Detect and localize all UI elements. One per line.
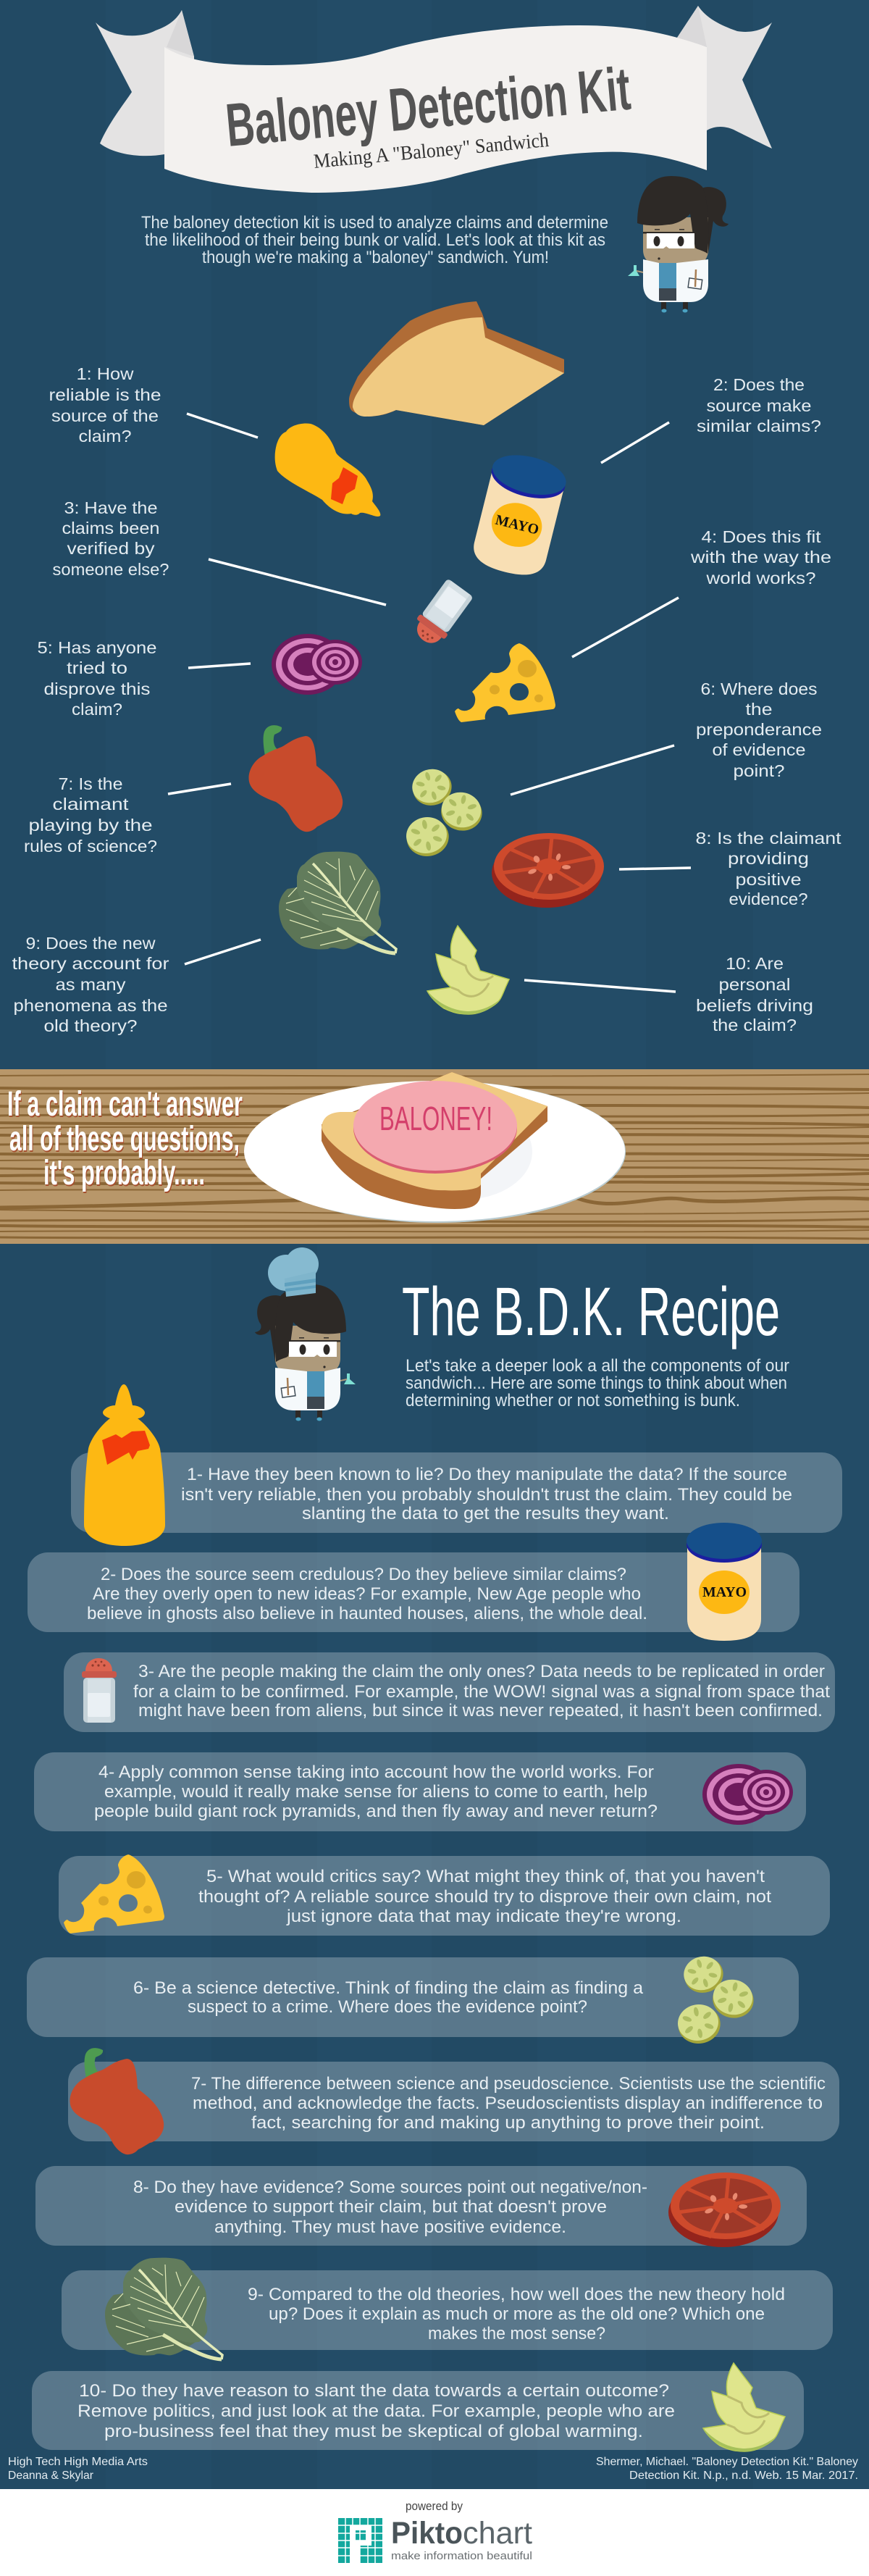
step 9 text: up? Does it explain as much or more as the old one? Which one xyxy=(269,2304,765,2324)
question 7: 7: Is the xyxy=(58,774,123,793)
question 1: 1: How xyxy=(77,364,134,383)
wood table band xyxy=(0,1069,869,1244)
callout: if a claim can't answer: it's probably..... xyxy=(43,1154,205,1192)
icon: avocado xyxy=(703,2363,785,2451)
icon: mustard bottle xyxy=(84,1384,165,1546)
icon: salt shaker xyxy=(82,1658,117,1723)
question 1: reliable is the xyxy=(49,385,161,404)
question 8: 8: Is the claimant xyxy=(695,829,841,848)
question 9: theory account for xyxy=(12,954,169,973)
step 8 text: anything. They must have positive evidence. xyxy=(214,2217,566,2237)
question 8: evidence? xyxy=(729,890,808,908)
question 5: tried to xyxy=(67,658,127,677)
callout: if a claim can't answer: all of these questions, xyxy=(9,1120,240,1158)
icon: lettuce xyxy=(105,2258,222,2359)
question 10 xyxy=(696,954,813,1034)
footer credits: High Tech High Media Arts xyxy=(8,2456,148,2468)
step 2 text: Are they overly open to new ideas? For example, New Age people who xyxy=(93,1584,641,1604)
question 9: old theory? xyxy=(43,1016,138,1035)
question 7: claimant xyxy=(52,795,129,814)
question 8: providing xyxy=(728,849,809,868)
step 3 text: 3- Are the people making the claim the only ones? Data needs to be replicated in order xyxy=(138,1662,825,1681)
step 10 text: 10- Do they have reason to slant the data towards a certain outcome? xyxy=(79,2381,669,2401)
step 5 text: just ignore data that may indicate they're wrong. xyxy=(286,1907,681,1926)
icon: cucumber slices xyxy=(403,764,486,860)
question 3: claims been xyxy=(62,519,159,538)
question 10: the claim? xyxy=(713,1016,797,1034)
icon: beet xyxy=(702,1764,793,1825)
question 3: someone else? xyxy=(52,560,169,579)
step 1 text xyxy=(181,1465,792,1523)
powered by label: powered by xyxy=(406,2499,463,2513)
connector 10 xyxy=(524,980,676,992)
step 7 text: 7- The difference between science and pseudoscience. Scientists use the scientific xyxy=(191,2074,826,2094)
step 5 text: 5- What would critics say? What might they think of, that you haven't xyxy=(206,1867,765,1886)
step 7 text: method, and acknowledge the facts. Pseudoscientists display an indifference to xyxy=(193,2094,823,2113)
icon: salt shaker xyxy=(408,577,474,650)
question 1: source of the xyxy=(51,406,159,425)
intro text: The baloney detection kit is used to analyze claims and determine xyxy=(141,213,608,233)
question 3 xyxy=(52,498,169,579)
question 9: 9: Does the new xyxy=(26,934,156,953)
panel: step 10 xyxy=(32,2363,804,2451)
callout: if a claim can't answer xyxy=(7,1085,243,1192)
question 2: similar claims? xyxy=(697,417,821,435)
panel: step 4 xyxy=(34,1752,806,1831)
recipe intro: determining whether or not something is bunk. xyxy=(406,1391,740,1410)
recipe intro: sandwich... Here are some things to think about when xyxy=(406,1373,787,1393)
question 4: with the way the xyxy=(690,548,831,566)
icon: mayo jar xyxy=(687,1523,762,1641)
question 9 xyxy=(12,934,169,1035)
question 6: the xyxy=(746,700,772,719)
question 2 xyxy=(697,375,821,435)
footer citation: Detection Kit. N.p., n.d. Web. 15 Mar. 2017. xyxy=(629,2470,858,2482)
step 3 text: might have been from aliens, but since it was never repeated, it hasn't been confirmed. xyxy=(138,1701,823,1720)
icon: tomato xyxy=(668,2173,781,2247)
step 7 text: fact, searching for and making up anything to prove their point. xyxy=(251,2113,765,2133)
icon: beet xyxy=(272,634,362,695)
step 9 text xyxy=(248,2285,785,2343)
icon: cheese xyxy=(64,1854,164,1933)
step 3 text xyxy=(133,1662,830,1720)
icon: red pepper xyxy=(70,2048,164,2154)
connector 3 xyxy=(209,559,386,605)
icon: red pepper xyxy=(248,725,343,832)
question 10: 10: Are xyxy=(726,954,784,973)
step 9 text: makes the most sense? xyxy=(428,2324,605,2343)
panel: step 3 xyxy=(64,1652,835,1732)
question 8: positive xyxy=(736,870,801,889)
plate xyxy=(244,1081,626,1223)
step 7 text xyxy=(191,2074,826,2133)
question 1: claim? xyxy=(78,427,132,446)
question 4 xyxy=(690,527,831,587)
connector 8 xyxy=(619,868,691,869)
question 5: disprove this xyxy=(43,679,151,698)
step 5 text xyxy=(198,1867,771,1926)
question 5 xyxy=(38,638,156,719)
step 2 text: 2- Does the source seem credulous? Do they believe similar claims? xyxy=(101,1565,626,1584)
step 5 text: thought of? A reliable source should try to disprove their own claim, not xyxy=(198,1887,771,1907)
question 5: claim? xyxy=(72,700,122,719)
question 6: 6: Where does xyxy=(701,679,817,698)
question 10: personal xyxy=(718,975,791,994)
sandwich with baloney xyxy=(322,1072,547,1209)
connector 9 xyxy=(185,940,261,964)
character: scientist xyxy=(628,176,729,313)
question 9: as many xyxy=(55,975,126,994)
footer citation: Shermer, Michael. "Baloney Detection Kit." Baloney xyxy=(596,2456,858,2468)
step 10 text xyxy=(77,2381,675,2441)
question 4: 4: Does this fit xyxy=(701,527,821,546)
panel: step 1 xyxy=(71,1384,842,1546)
question 6: point? xyxy=(733,761,785,780)
panel: step 9 xyxy=(62,2258,833,2359)
connector 2 xyxy=(601,422,669,463)
step 4 text: people build giant rock pyramids, and then fly away and never return? xyxy=(94,1802,658,1821)
step 10 text: Remove politics, and just look at the data. For example, people who are xyxy=(77,2401,675,2421)
piktochart logo xyxy=(338,2516,532,2563)
question 6 xyxy=(696,679,822,780)
intro text: the likelihood of their being bunk or valid. Let's look at this kit as xyxy=(145,230,605,250)
footer citation xyxy=(596,2456,858,2482)
logo wordmark xyxy=(391,2516,532,2551)
question 7: playing by the xyxy=(29,816,152,835)
question 10: beliefs driving xyxy=(696,996,813,1015)
step 8 text xyxy=(133,2178,647,2237)
question 2: 2: Does the xyxy=(713,375,805,394)
step 1 text: slanting the data to get the results they want. xyxy=(302,1504,669,1523)
icon: bread xyxy=(349,301,564,425)
step 3 text: for a claim to be confirmed. For example, the WOW! signal was a signal from space that xyxy=(133,1682,830,1702)
recipe intro: Let's take a deeper look a all the components of our xyxy=(406,1356,789,1376)
panel: step 5 xyxy=(59,1854,830,1936)
question 2: source make xyxy=(707,396,811,415)
logo wordmark: chart xyxy=(463,2516,532,2551)
panel: step 8 xyxy=(35,2166,807,2247)
step 8 text: evidence to support their claim, but that doesn't prove xyxy=(175,2197,607,2217)
step 6 text: 6- Be a science detective. Think of finding the claim as finding a xyxy=(133,1978,644,1998)
question 3: 3: Have the xyxy=(64,498,158,517)
baloney label: BALONEY! xyxy=(379,1100,492,1137)
footer credits xyxy=(8,2456,148,2482)
connector 4 xyxy=(572,598,679,657)
panel: step 6 xyxy=(27,1951,799,2047)
question 6: of evidence xyxy=(713,740,805,759)
step 1 text: 1- Have they been known to lie? Do they manipulate the data? If the source xyxy=(187,1465,787,1484)
step 2 text: believe in ghosts also believe in haunted houses, aliens, the whole deal. xyxy=(87,1604,647,1623)
step 2 text xyxy=(87,1565,647,1623)
connector 5 xyxy=(188,664,251,668)
panel: step 2 xyxy=(28,1523,799,1641)
icon: lettuce xyxy=(279,852,396,953)
question 9: phenomena as the xyxy=(13,996,168,1015)
step 6 text: suspect to a crime. Where does the evidence point? xyxy=(188,1997,587,2017)
question 1 xyxy=(49,364,161,446)
question 4: world works? xyxy=(705,569,815,587)
icon: tomato xyxy=(492,833,604,908)
connector 1 xyxy=(187,414,258,438)
connector 7 xyxy=(168,784,231,794)
question 7: rules of science? xyxy=(24,837,157,856)
icon: mustard xyxy=(275,424,380,517)
step 9 text: 9- Compared to the old theories, how well does the new theory hold xyxy=(248,2285,785,2304)
logo tagline: make information beautiful xyxy=(391,2550,532,2562)
panel: step 7 xyxy=(68,2048,839,2154)
question 7 xyxy=(24,774,157,856)
logo wordmark: Pikto xyxy=(391,2516,463,2551)
icon: avocado xyxy=(427,926,509,1014)
question 5: 5: Has anyone xyxy=(38,638,156,657)
icon: cucumber slices xyxy=(675,1951,757,2047)
intro text: though we're making a "baloney" sandwich. Yum! xyxy=(202,248,549,267)
question 3: verified by xyxy=(67,539,155,558)
title: Baloney Detection Kit xyxy=(223,54,633,159)
footer credits: Deanna & Skylar xyxy=(8,2470,94,2482)
character: chef xyxy=(255,1247,356,1421)
step 6 text xyxy=(133,1978,644,2017)
recipe intro xyxy=(406,1356,789,1410)
question 8 xyxy=(695,829,841,908)
step 10 text: pro-business feel that they must be skeptical of global warming. xyxy=(104,2422,643,2441)
title banner xyxy=(96,6,772,193)
icon: mayo jar: MAYO xyxy=(702,1584,747,1600)
step 4 text xyxy=(94,1762,658,1821)
callout: if a claim can't answer: If a claim can't answer xyxy=(7,1085,243,1124)
icon: cheese xyxy=(455,643,555,722)
step 4 text: example, would it really make sense for aliens to come to earth, help xyxy=(104,1782,647,1802)
icon: mayo jar: MAYO xyxy=(494,512,540,538)
subtitle: Making A "Baloney" Sandwich xyxy=(313,129,550,173)
step 8 text: 8- Do they have evidence? Some sources point out negative/non- xyxy=(133,2178,647,2197)
connector 6 xyxy=(511,745,674,795)
icon: mayo jar xyxy=(469,448,570,581)
step 4 text: 4- Apply common sense taking into account how the world works. For xyxy=(98,1762,654,1782)
intro text xyxy=(141,213,608,267)
step 1 text: isn't very reliable, then you probably shouldn't trust the claim. They could be xyxy=(181,1485,792,1505)
question 6: preponderance xyxy=(696,720,822,739)
